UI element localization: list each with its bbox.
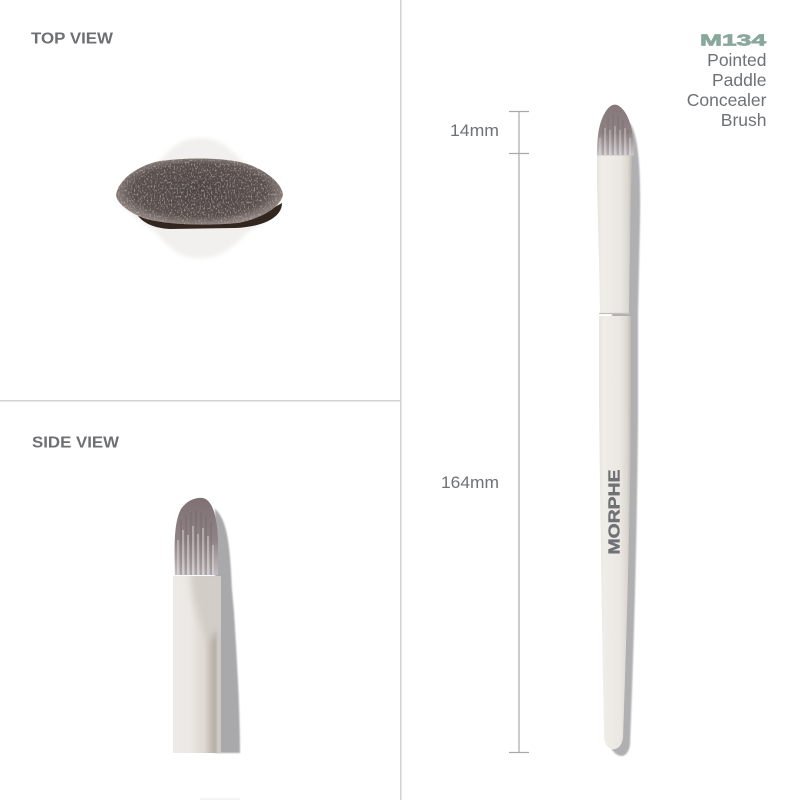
product name (687, 50, 767, 130)
label: bristle length: 14mm (450, 121, 499, 140)
heading: side view: SIDE VIEW (32, 434, 120, 452)
label: total length: 164mm (441, 473, 499, 492)
bristle head (116, 158, 283, 225)
cast shadow (612, 123, 640, 756)
product name: Paddle (712, 70, 766, 90)
bristles (175, 498, 218, 575)
product name: Concealer (687, 90, 767, 110)
bristle base shadow (138, 203, 282, 229)
bristle strands (600, 115, 630, 155)
bristles (597, 105, 634, 156)
photo: brush side view (173, 498, 240, 800)
ferrule (597, 155, 632, 313)
bristle strands (178, 510, 213, 575)
photo: full brush (597, 105, 640, 756)
faint lower detail (200, 798, 240, 800)
panel dividers (0, 0, 402, 800)
cast shadow (214, 508, 240, 753)
product name: Brush (721, 110, 766, 130)
ferrule crease (188, 576, 218, 638)
handle (173, 576, 221, 753)
brand wordmark: MORPHE (606, 470, 624, 554)
title block (687, 32, 767, 130)
handle (599, 316, 631, 749)
ferrule joint (599, 312, 630, 314)
photo: brush top view (116, 138, 283, 258)
model number: M134 (700, 32, 766, 50)
product name: Pointed (707, 50, 766, 70)
ferrule behind bristles (120, 138, 283, 258)
heading: top view: TOP VIEW (31, 30, 114, 48)
dimension line: length measures (509, 111, 529, 753)
